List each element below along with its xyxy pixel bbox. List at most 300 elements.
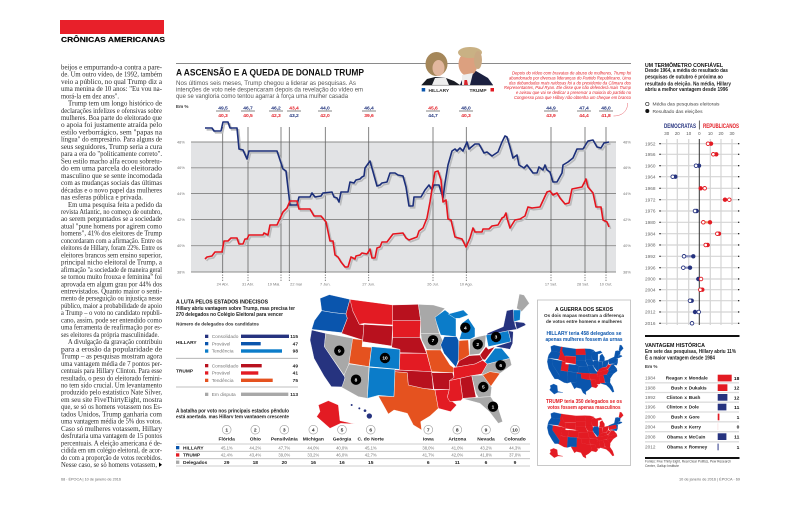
table: swing states: 4 bbox=[312, 427, 315, 433]
election years: 1964 bbox=[645, 174, 656, 179]
panel: delegates by candidate: 270 delegados no Colégio Eleitoral para vencer bbox=[176, 312, 283, 318]
table: swing states: Iowa bbox=[423, 437, 434, 443]
table: swing states: 41,8% bbox=[480, 453, 492, 458]
article text column: ses eleitores da própria masculinidade. bbox=[61, 331, 159, 339]
article text column: desfrutaria uma vantagem de 15 pontos bbox=[61, 432, 162, 440]
panel: historic advantage: Dole bbox=[689, 405, 699, 410]
poll value pairs: 45,6 bbox=[428, 106, 438, 112]
line: Hillary bbox=[205, 122, 609, 206]
table: swing states: C. do Norte bbox=[358, 437, 384, 443]
chart axis labels: 17 Set. bbox=[545, 282, 557, 286]
article text column: estilo verborrágico, sem "papas na bbox=[61, 128, 163, 136]
panel: battle of the sexes: A GUERRA DOS SEXOS bbox=[555, 307, 614, 313]
article text column: centuais para Hillary Clinton. Para esse bbox=[61, 367, 162, 375]
chart axis labels: 27 Jun. bbox=[362, 282, 375, 286]
panel: historic advantage: 1996 bbox=[645, 405, 656, 410]
election years: 1972 bbox=[645, 197, 656, 202]
panel: reliable thermometer: pesquisas de outubro é próxima ao bbox=[645, 75, 723, 81]
panel: battle of the sexes: HILLARY teria 458 delegados se bbox=[546, 331, 622, 337]
article text column: produzido pelo estatístico Nate Silver, bbox=[61, 389, 162, 397]
panel: battle of the sexes: TRUMP teria 350 delegados se os bbox=[546, 399, 622, 405]
poll value pairs: 46,2 bbox=[271, 106, 281, 112]
chart axis labels: 46% bbox=[177, 165, 185, 170]
main chart heading: que se vangloria como tentou agarrar à força uma mulher casada bbox=[176, 94, 349, 100]
panel: historic advantage: Fontes: Five Thirty Eight, Real Clear Politics, Pew Research bbox=[645, 459, 731, 464]
table: swing states: 16 bbox=[339, 460, 345, 466]
table: swing states: Arizona bbox=[448, 437, 467, 443]
map: men only vote bbox=[547, 412, 623, 458]
table: swing states: 41,7% bbox=[422, 453, 435, 458]
panel: historic advantage: Gore bbox=[689, 415, 700, 420]
panel: battle of the sexes: Os dois mapas mostram a diferença bbox=[544, 313, 624, 319]
panel: reliable thermometer: abriu a melhor vantagem desde 1996 bbox=[645, 87, 728, 93]
table: swing states: 39,0% bbox=[278, 453, 291, 458]
section tag: Crônicas Americanas: CRÔNICAS AMERICANAS bbox=[61, 35, 165, 44]
panel: reliable thermometer: 10 bbox=[686, 131, 692, 136]
article text column: eleitores brancos sem ensino superior, bbox=[61, 251, 162, 259]
article text column: beijos e empurrando-a contra a pare- bbox=[61, 63, 163, 71]
article text column: declarações infelizes e ofensivas sobre bbox=[61, 107, 162, 115]
panel: delegates by candidate: 113 bbox=[290, 392, 298, 398]
line chart: voting intention bbox=[176, 104, 631, 286]
article text column: mulheres. Boa parte do eleitorado que bbox=[61, 114, 162, 122]
article text column: Seu estilo macho alfa ecoou sobretu- bbox=[61, 157, 163, 165]
panel: delegates by candidate: Tendência bbox=[212, 349, 234, 355]
line: Trump bbox=[205, 171, 609, 267]
poll value pairs: 49,5 bbox=[218, 106, 228, 112]
legend: candidates: TRUMP bbox=[470, 88, 487, 94]
table: swing states: 37,0% bbox=[509, 453, 521, 458]
panel: battle of the sexes bbox=[538, 300, 630, 466]
panel: historic advantage: 18 bbox=[734, 376, 740, 382]
article text column: eleitores de Hillary, foram 22%. Entre os bbox=[61, 244, 162, 252]
panel: historic advantage: Obama bbox=[667, 434, 683, 439]
panel: delegates by candidate: Hillary abriu vantagem sobre Trump, mas precisa ter bbox=[176, 306, 295, 312]
panel: historic advantage: 1984 bbox=[645, 376, 656, 381]
table: swing states: HILLARY bbox=[183, 445, 204, 451]
chart axis labels: 31 Abr. bbox=[242, 282, 254, 286]
panel: reliable thermometer bbox=[645, 61, 739, 326]
chart axis labels: 10 Ago. bbox=[460, 282, 473, 286]
election years: 1960 bbox=[645, 163, 656, 168]
panel: historic advantage: 2004 bbox=[645, 424, 656, 429]
election years bbox=[645, 141, 656, 326]
panel: historic advantage: 11 bbox=[734, 435, 740, 441]
article text column: Trump tem um longo histórico de bbox=[68, 100, 162, 108]
panel: delegates by candidate: HILLARY bbox=[176, 340, 197, 346]
panel: reliable thermometer: 0 bbox=[698, 131, 701, 136]
panel: historic advantage: x bbox=[684, 415, 687, 420]
election years: 2012 bbox=[645, 310, 656, 315]
panel: historic advantage: Bush bbox=[671, 385, 683, 390]
article text column: no tem sido crucial. Um levantamento bbox=[61, 382, 162, 390]
table: swing states: 33,2% bbox=[307, 453, 320, 458]
table: swing states: 41,0% bbox=[451, 445, 464, 450]
article text column: revista Atlantic, no começo de outubro, bbox=[61, 208, 162, 216]
article text column: uma vantagem média de 7 pontos per- bbox=[61, 360, 163, 368]
article text column: resultado, o peso do eleitorado femini- bbox=[61, 374, 163, 382]
poll value pairs: 42,3 bbox=[271, 113, 281, 119]
dumbbell marks: poll vs result bbox=[671, 142, 731, 325]
article text column: nas esferas pública e privada. bbox=[61, 194, 143, 202]
article text column: em seu site FiveThirtyEight, mostra bbox=[61, 396, 163, 404]
panel: historic advantage: 1 bbox=[737, 415, 740, 421]
article text column: uma vantagem média de 5% dos votos. bbox=[61, 418, 162, 426]
panel: historic advantage: Dukakis bbox=[689, 385, 707, 390]
panel: historic advantage: 2000 bbox=[645, 415, 656, 420]
chart axis labels: 7 Jun. bbox=[320, 282, 331, 286]
table: swing states: 47,7% bbox=[278, 445, 291, 450]
election years: 1988 bbox=[645, 243, 656, 248]
article text column: a Trump – o voto no candidato republi- bbox=[61, 309, 163, 317]
table: swing states: Michigan bbox=[303, 437, 324, 443]
article text column: público, maior a probabilidade de apoio bbox=[61, 302, 162, 310]
table: swing states: 8 bbox=[456, 427, 459, 433]
article text column: A divulgação da gravação contribuiu bbox=[68, 338, 162, 346]
panel: delegates by candidate: A LUTA PELOS ESTADOS INDECISOS bbox=[176, 300, 269, 306]
table: swing states: 5 bbox=[341, 427, 344, 433]
table: swing states: 44,0% bbox=[307, 445, 320, 450]
panel: historic advantage: 12 bbox=[734, 395, 740, 401]
main chart heading bbox=[176, 64, 631, 100]
red annotation: abandonado por diversas lideranças do Partido Republicano. Uma bbox=[509, 76, 632, 80]
article text column: o apoia foi justamente atraída pelo bbox=[61, 121, 162, 129]
article text column: afirmação "a sociedade de maneira geral bbox=[61, 266, 162, 274]
panel: delegates by candidate: 49 bbox=[293, 363, 298, 369]
panel: delegates by candidate: Número de delegados dos candidatos bbox=[176, 322, 259, 328]
table: swing states: 44,3% bbox=[509, 445, 521, 450]
article text column: com as mudanças sociais das últimas bbox=[61, 179, 162, 187]
table: swing states bbox=[176, 425, 530, 466]
poll value pairs: 47,4 bbox=[579, 106, 589, 112]
article text column: do em uma parcela do eleitorado bbox=[61, 165, 162, 173]
table: swing states: 2 bbox=[254, 427, 257, 433]
table: swing states: 42,7% bbox=[365, 453, 377, 458]
red annotation: Depois do vídeo com bravatas de abuso de mulheres, Trump foi bbox=[512, 70, 632, 76]
chart axis labels: 28 Set. bbox=[577, 282, 589, 286]
article text column: Caso só mulheres votassem, Hillary bbox=[61, 425, 162, 433]
red annotation: Congresso para que Hillary não obtenha um cheque em branco bbox=[514, 95, 632, 100]
panel: reliable thermometer: Resultado das eleições bbox=[652, 109, 703, 115]
article text column: que, se só os homens votassem nos Es- bbox=[61, 403, 163, 411]
chart axis labels: 22 mai bbox=[290, 282, 302, 286]
article text column: principal nicho eleitoral de Trump, a bbox=[61, 259, 163, 267]
article text column: de. Um outro vídeo, de 1992, também bbox=[61, 71, 162, 79]
panel: historic advantage: Reagan bbox=[666, 376, 683, 381]
panel: historic advantage: x bbox=[684, 424, 687, 429]
footer left: 68 · ÉPOCA | 10 de janeiro de 2016 bbox=[61, 476, 121, 482]
panel: delegates by candidate: Em disputa bbox=[212, 392, 236, 398]
panel: delegates by candidate: Consolidado bbox=[212, 363, 239, 369]
red annotation: das debandadas mais ruidosas foi a do presidente da Câmara dos bbox=[509, 80, 632, 85]
chart axis labels: 40% bbox=[177, 243, 185, 248]
article text column: aprovada em algum grau por 44% dos bbox=[61, 280, 162, 288]
article text column: para a erosão da popularidade de bbox=[61, 345, 162, 353]
election years: 1968 bbox=[645, 186, 656, 191]
election years: 1952 bbox=[645, 141, 656, 146]
map number badges: 5 bbox=[482, 385, 485, 391]
table: swing states: 3 bbox=[283, 427, 286, 433]
chart axis labels: 10 Out. bbox=[600, 282, 612, 286]
panel: historic advantage: 1 bbox=[737, 445, 740, 451]
table: swing states: 29 bbox=[224, 460, 230, 466]
panel: historic advantage: Em % bbox=[645, 364, 658, 369]
election years: 2016 bbox=[645, 321, 656, 326]
panel: historic advantage: x bbox=[684, 395, 687, 400]
poll value pairs: 44,4 bbox=[579, 113, 589, 119]
portrait: Hillary bbox=[422, 52, 460, 85]
panel: historic advantage: x bbox=[684, 434, 687, 439]
red annotation: e avisou que vai se dedicar a preservar a maioria do partido no bbox=[516, 90, 632, 95]
chart axis labels: 48% bbox=[177, 139, 185, 144]
table: swing states: Flórida bbox=[219, 437, 235, 443]
table: swing states: Nevada bbox=[477, 437, 495, 443]
main chart heading: intenções de voto nele despencaram depois da revelação do vídeo em bbox=[176, 87, 363, 93]
poll value pairs: 40,3 bbox=[218, 113, 228, 119]
article text column: uma ferramenta de reafirmação por es- bbox=[61, 324, 163, 332]
panel: historic advantage: x bbox=[684, 405, 687, 410]
poll value pairs: 48,0 bbox=[601, 106, 611, 112]
panel: historic advantage: 0 bbox=[737, 425, 740, 431]
panel: historic advantage: Clinton bbox=[667, 405, 683, 410]
panel: reliable thermometer: 10 bbox=[708, 131, 713, 136]
poll value pairs: 40,5 bbox=[243, 113, 253, 119]
poll value pairs: 43,4 bbox=[289, 106, 299, 112]
article text column: décadas e o novo papel das mulheres bbox=[61, 186, 162, 194]
chart axis labels: 46% bbox=[623, 165, 631, 170]
article text column: percentuais. A eleição americana é de- bbox=[61, 439, 163, 447]
chart axis labels: 19 Mai. bbox=[268, 282, 280, 286]
panel: delegates by candidate bbox=[176, 300, 298, 398]
panel: delegates by candidate: Provável bbox=[212, 371, 230, 377]
map number badges: 4 bbox=[464, 325, 467, 331]
election years: 1996 bbox=[645, 265, 656, 270]
article text column: Nesse caso, se só homens votassem, bbox=[61, 461, 157, 469]
table: swing states: 16 bbox=[311, 460, 316, 466]
poll value pairs: 43,9 bbox=[546, 113, 556, 119]
table: swing states: 6 bbox=[369, 427, 372, 433]
poll value pairs bbox=[216, 106, 613, 119]
panel: reliable thermometer: REPUBLICANOS bbox=[703, 124, 739, 130]
table: swing states: 42,0% bbox=[451, 453, 464, 458]
panel: reliable thermometer: resultado da eleição. Na média, Hillary bbox=[645, 81, 731, 87]
panel: historic advantage: McCain bbox=[689, 434, 706, 439]
footer right: 10 de janeiro de 2016 | ÉPOCA · 69 bbox=[679, 476, 740, 482]
article text column: mento de perseguição ou injustiça nesse bbox=[61, 295, 162, 303]
article text column: cano, assim, pode ser entendido como bbox=[61, 316, 162, 324]
panel: historic advantage: x bbox=[684, 376, 687, 381]
table: swing states: Delegados bbox=[183, 460, 208, 466]
panel: historic advantage: 12 bbox=[734, 386, 740, 392]
table: swing states: 42,4% bbox=[221, 453, 233, 458]
table: swing states: 9 bbox=[514, 460, 517, 466]
panel: reliable thermometer: DEMOCRATAS bbox=[664, 124, 696, 130]
election years: 1976 bbox=[645, 209, 656, 214]
table: swing states: 18 bbox=[253, 460, 258, 466]
main chart heading: Nos últimos seis meses, Trump chegou a liderar as pesquisas. As bbox=[176, 81, 356, 87]
panel: delegates by candidate: 75 bbox=[293, 378, 298, 384]
panel: historic advantage: Mondale bbox=[689, 376, 708, 381]
panel: battle of the sexes: votos fossem apenas masculinos bbox=[548, 405, 621, 411]
panel: historic advantage: Center, Gallup Institute bbox=[645, 463, 679, 468]
panel: historic advantage: Bush bbox=[689, 395, 701, 400]
panel: historic advantage: Bush bbox=[671, 424, 683, 429]
article text column: Em uma pesquisa feita a pedido da bbox=[68, 201, 163, 209]
panel: reliable thermometer: Desde 1964, a média do resultado das bbox=[645, 68, 728, 74]
table: swing states: Pensilvânia bbox=[271, 437, 298, 443]
election years: 1980 bbox=[645, 220, 656, 225]
election years: 2000 bbox=[645, 277, 656, 282]
chart axis labels: 44% bbox=[623, 191, 631, 196]
article text column: entrevistados. Quanto maior o senti- bbox=[61, 288, 163, 296]
swing states intro: A batalha por voto nos principais estados pêndulo bbox=[176, 408, 289, 414]
table: swing states: Geórgia bbox=[333, 437, 352, 443]
panel: historic advantage: 2008 bbox=[645, 434, 656, 439]
panel: reliable thermometer: 30 bbox=[664, 131, 670, 136]
map number badges: 10 bbox=[382, 356, 388, 362]
election years: 1956 bbox=[645, 152, 656, 157]
article text column: Trump – as pesquisas mostram agora bbox=[61, 353, 163, 361]
map number badges: 3 bbox=[495, 335, 498, 341]
dumbbell chart grid bbox=[660, 139, 739, 325]
main chart heading: A ASCENSÃO E A QUEDA DE DONALD TRUMP bbox=[176, 68, 365, 78]
panel: historic advantage: Romney bbox=[689, 445, 708, 450]
table: swing states: 6 bbox=[485, 460, 488, 466]
portrait: Trump bbox=[422, 47, 493, 85]
election years: 1992 bbox=[645, 254, 656, 259]
article text column: uma menina de 10 anos: "Eu vou na- bbox=[61, 85, 163, 93]
article text column: masculino que se sente incomodada bbox=[61, 172, 163, 180]
table: swing states: 6 bbox=[427, 460, 430, 466]
map number badges: 7 bbox=[432, 338, 435, 344]
panel: battle of the sexes: de votos entre homens e mulheres bbox=[546, 319, 622, 325]
panel: historic advantage: Bush bbox=[671, 415, 683, 420]
panel: reliable thermometer: Média das pesquisas eleitorais bbox=[652, 102, 720, 108]
article text column bbox=[61, 63, 163, 469]
map number badges: 9 bbox=[338, 348, 341, 354]
swing states intro: está apertada, mas Hillary tem vantagem crescente bbox=[176, 414, 289, 420]
map number badges: 1 bbox=[492, 404, 495, 410]
table: swing states: 43,4% bbox=[249, 453, 262, 458]
article text column: língua" do empresário. Para alguns de bbox=[61, 136, 162, 144]
poll value pairs: 46,4 bbox=[364, 106, 374, 112]
legend: candidates: HILLARY bbox=[428, 88, 450, 94]
chart axis labels: 38% bbox=[623, 269, 631, 274]
panel: delegates by candidate: 47 bbox=[293, 341, 298, 347]
panel: battle of the sexes: apenas mulheres fossem às urnas bbox=[546, 337, 623, 343]
chart axis labels: 38% bbox=[177, 269, 185, 274]
article text column: se tornou muito frouxa e feminina" foi bbox=[61, 273, 162, 281]
article text column: atual "pune homens por agirem como bbox=[61, 222, 162, 230]
poll value pairs: 43,2 bbox=[289, 113, 299, 119]
panel: historic advantage: É a maior vantagem desde 1984 bbox=[645, 354, 715, 362]
panel: historic advantage: 11 bbox=[734, 405, 740, 411]
table: swing states: 45,1% bbox=[365, 445, 377, 450]
panel: historic advantage: x bbox=[684, 385, 687, 390]
article text column: ao serem perguntados se a sociedade bbox=[61, 215, 162, 223]
chart axis labels: 26 Jul. bbox=[427, 282, 439, 286]
poll value pairs: 44,7 bbox=[428, 113, 438, 119]
table: swing states: 38,0% bbox=[422, 445, 435, 450]
chart axis labels: Em % bbox=[176, 104, 189, 109]
panel: delegates by candidate: TRUMP bbox=[176, 368, 194, 374]
table: swing states: 20 bbox=[282, 460, 287, 466]
panel: delegates by candidate: 115 bbox=[290, 334, 298, 340]
article text column: cidida em um colégio eleitoral, de acor- bbox=[61, 447, 163, 455]
table: swing states: Colorado bbox=[504, 437, 526, 443]
panel: delegates by candidate: 41 bbox=[293, 371, 298, 377]
table: swing states: 11 bbox=[455, 460, 460, 466]
election years: 2008 bbox=[645, 298, 656, 303]
panel: historic advantage: 1988 bbox=[645, 385, 656, 390]
table: swing states: 7 bbox=[427, 427, 430, 433]
article text column: para a era do "politicamente correto". bbox=[61, 150, 162, 158]
map number badges bbox=[334, 322, 506, 412]
poll value pairs: 42,0 bbox=[320, 113, 330, 119]
chart axis labels: 48% bbox=[623, 139, 631, 144]
chart axis labels: 42% bbox=[623, 217, 631, 222]
panel: historic advantage: Clinton bbox=[667, 395, 683, 400]
table: swing states: 46,0% bbox=[336, 453, 348, 458]
panel: historic advantage: 1992 bbox=[645, 395, 656, 400]
poll value pairs: 46,7 bbox=[243, 106, 253, 112]
chart axis labels: 42% bbox=[177, 217, 185, 222]
panel: historic advantage: 2012 bbox=[645, 445, 656, 450]
panel: historic advantage: x bbox=[684, 445, 687, 450]
panel: historic advantage: Kerry bbox=[689, 424, 701, 429]
panel: reliable thermometer: 20 bbox=[719, 131, 724, 136]
section tag: Crônicas Americanas bbox=[60, 20, 165, 44]
red annotation bbox=[504, 70, 632, 100]
table: swing states: 1 bbox=[225, 427, 228, 433]
table: swing states: 43,2% bbox=[480, 445, 492, 450]
panel: reliable thermometer: UM TERMÔMETRO CONFIÁVEL bbox=[645, 61, 724, 69]
map: women only vote bbox=[547, 345, 623, 395]
table: swing states: 44,2% bbox=[249, 445, 262, 450]
swing states intro bbox=[176, 408, 310, 424]
poll value pairs: 44,9 bbox=[546, 106, 556, 112]
panel: historic advantage: Em sete das pesquisas, Hillary abriu 11% bbox=[645, 349, 737, 355]
panel: historic advantage: VANTAGEM HISTÓRICA bbox=[645, 341, 705, 349]
poll value pairs: 48,0 bbox=[461, 106, 471, 112]
article text column: seus seguidores, Trump seria a cura bbox=[61, 143, 163, 151]
panel: delegates by candidate: 98 bbox=[293, 349, 298, 355]
panel: delegates by candidate: Provável bbox=[212, 341, 230, 347]
poll value pairs: 44,0 bbox=[320, 106, 330, 112]
red annotation: Representantes, Paul Ryan. Ele disse que não defenderá mais Trump bbox=[504, 85, 632, 90]
panel: historic advantage bbox=[645, 335, 740, 468]
map number badges: 8 bbox=[355, 377, 358, 383]
article text column: homens", 41% dos eleitores de Trump bbox=[61, 230, 162, 238]
annotation arrow bbox=[614, 103, 628, 116]
table: swing states: Ohio bbox=[250, 437, 261, 443]
election years: 2004 bbox=[645, 287, 656, 292]
map number badges: 6 bbox=[499, 363, 502, 369]
table: swing states: 9 bbox=[485, 427, 488, 433]
table: swing states: 45,1% bbox=[221, 445, 233, 450]
map number badges: 2 bbox=[476, 342, 479, 348]
electoral map: swing states bbox=[310, 294, 529, 430]
poll value pairs: 39,6 bbox=[364, 113, 374, 119]
chart axis labels: 40% bbox=[623, 243, 631, 248]
article text column: veio a público, no qual Trump diz a bbox=[61, 78, 163, 86]
poll value pairs: 41,8 bbox=[601, 113, 611, 119]
legend: candidates bbox=[422, 88, 494, 94]
table: swing states: TRUMP bbox=[183, 453, 201, 459]
article text column: concordaram com a afirmação. Entre os bbox=[61, 237, 162, 245]
table: swing states: 40,0% bbox=[336, 445, 348, 450]
panel: reliable thermometer: 30 bbox=[730, 131, 735, 136]
